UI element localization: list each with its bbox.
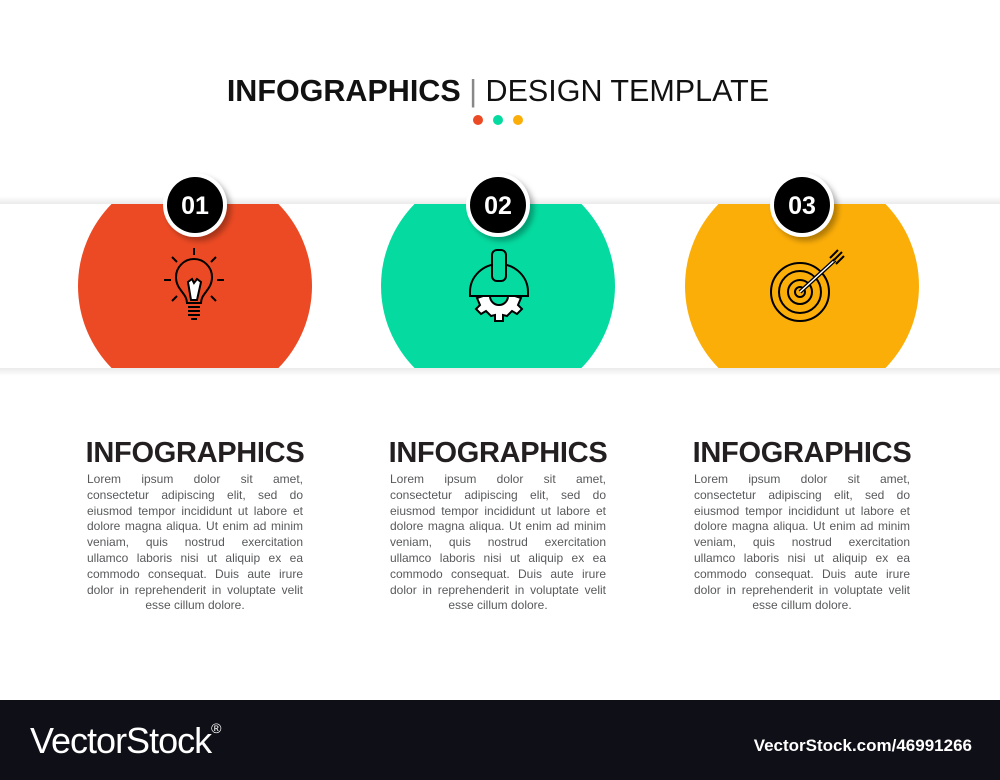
badge 02 <box>466 173 530 237</box>
badge 03: 03 <box>788 192 816 220</box>
text 2: esse cillum dolore. <box>448 598 548 612</box>
badge 02: 02 <box>484 192 512 220</box>
text 2: eiusmod tempor incididunt ut labore et <box>390 504 606 518</box>
text 2: consectetur adipiscing elit, sed do <box>390 488 606 502</box>
text 2: Lorem ipsum dolor sit amet, <box>390 472 606 486</box>
badge 03 <box>770 173 834 237</box>
text 1: Lorem ipsum dolor sit amet, <box>87 472 303 486</box>
text 3: dolor in reprehenderit in voluptate velit <box>694 583 910 597</box>
text 1: dolor in reprehenderit in voluptate velit <box>87 583 303 597</box>
panel 3 circle <box>685 204 919 368</box>
footer url: VectorStock.com/46991266 <box>754 736 972 755</box>
text 1: esse cillum dolore. <box>145 598 245 612</box>
text 2: veniam, quis nostrud exercitation <box>390 535 606 549</box>
text 3: Lorem ipsum dolor sit amet, <box>694 472 910 486</box>
footer logo: VectorStock® <box>30 720 220 761</box>
text 2 <box>390 472 606 612</box>
badge 01 <box>163 173 227 237</box>
panel 1 circle <box>78 204 312 368</box>
text 3 <box>694 472 910 612</box>
text 3: commodo consequat. Duis aute irure <box>694 567 910 581</box>
footer bar <box>0 700 1000 780</box>
text 3: veniam, quis nostrud exercitation <box>694 535 910 549</box>
badge 01: 01 <box>181 192 209 220</box>
text 1 <box>87 472 304 612</box>
text 1: commodo consequat. Duis aute irure <box>87 567 303 581</box>
heading 1: INFOGRAPHICS <box>86 437 304 469</box>
icon: target with arrow <box>771 250 844 321</box>
text 1: veniam, quis nostrud exercitation <box>87 535 303 549</box>
heading 3: INFOGRAPHICS <box>693 437 911 469</box>
text 2: dolore magna aliqua. Ut enim ad minim <box>390 519 606 533</box>
text 1: ullamco laboris nisi ut aliquip ex ea <box>87 551 303 565</box>
text 3: dolore magna aliqua. Ut enim ad minim <box>694 519 910 533</box>
text 1: consectetur adipiscing elit, sed do <box>87 488 303 502</box>
text 3: ullamco laboris nisi ut aliquip ex ea <box>694 551 910 565</box>
text 2: ullamco laboris nisi ut aliquip ex ea <box>390 551 606 565</box>
top graphic <box>0 79 1000 372</box>
icon: light bulb <box>164 248 224 319</box>
text 3: esse cillum dolore. <box>752 598 852 612</box>
text 2: commodo consequat. Duis aute irure <box>390 567 606 581</box>
panel 2 circle <box>381 204 615 368</box>
title dots <box>473 115 523 125</box>
title: INFOGRAPHICS | DESIGN TEMPLATE <box>227 74 769 108</box>
text 2: dolor in reprehenderit in voluptate velit <box>390 583 606 597</box>
icon: hard hat with gear <box>470 250 528 321</box>
text 3: eiusmod tempor incididunt ut labore et <box>694 504 910 518</box>
heading 2: INFOGRAPHICS <box>389 437 607 469</box>
text 1: eiusmod tempor incididunt ut labore et <box>87 504 303 518</box>
text 1: dolore magna aliqua. Ut enim ad minim <box>87 519 303 533</box>
text 3: consectetur adipiscing elit, sed do <box>694 488 910 502</box>
band shadows <box>0 196 1000 376</box>
